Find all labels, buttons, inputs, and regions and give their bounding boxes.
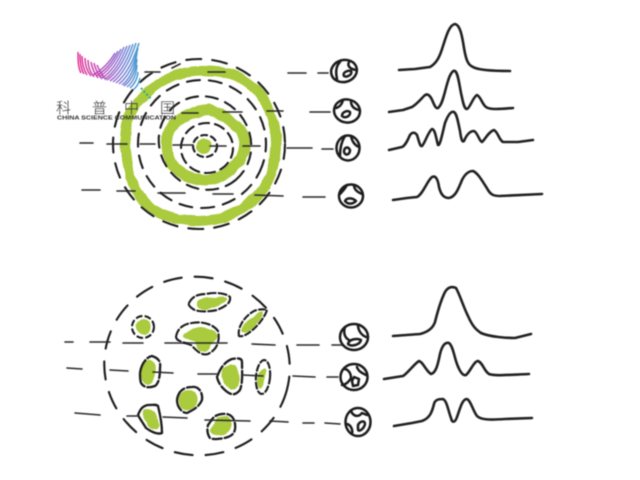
green centre dot (196, 138, 212, 154)
patch lower centre (175, 387, 201, 413)
green outer ring (125, 71, 276, 221)
logo teal dots (141, 88, 151, 99)
cell 7 (346, 408, 370, 436)
cell icons: top group (329, 57, 363, 208)
patch lower left (143, 410, 159, 429)
patch lower right (210, 416, 232, 436)
logo English wordmark: CHINA SCIENCE COMMUNICATION (57, 116, 176, 122)
diagram: concentric ring pattern (125, 71, 276, 221)
peak 1 (399, 24, 510, 71)
logo Chinese wordmark: 科 (56, 100, 71, 117)
green inner ring (167, 110, 245, 180)
scan lines: bottom group (65, 342, 342, 424)
cell 2 (332, 97, 362, 125)
logo Chinese wordmark: 中 (124, 100, 139, 117)
scan lines: top group (80, 64, 333, 197)
cell icons: bottom group (340, 324, 370, 436)
patch centre (183, 327, 219, 352)
peak 3 (389, 112, 533, 150)
patch left middle (140, 359, 156, 385)
spectrum curves: top group (389, 24, 542, 200)
cell 5 (340, 324, 368, 350)
dashed rings: outer circle bottom (84, 256, 310, 476)
peak 6 (384, 343, 529, 379)
patch right middle (222, 365, 239, 390)
peak 5 (393, 287, 531, 338)
dashed rings: concentric (113, 59, 285, 229)
logo Chinese wordmark: 普 (92, 100, 107, 117)
spectrum curves: bottom group (384, 287, 532, 426)
peak 4 (393, 171, 542, 200)
cell 1 (329, 57, 359, 85)
logo fan stripes (78, 43, 140, 90)
patch outlines (132, 293, 271, 439)
patch right diagonal (241, 311, 263, 333)
cell 6 (340, 364, 368, 390)
logo Chinese wordmark: 国 (160, 100, 175, 117)
cell 3 (336, 136, 360, 160)
peak 7 (394, 399, 532, 426)
patch top (197, 297, 227, 310)
peak 2 (389, 71, 513, 112)
logo Chinese wordmark (56, 100, 175, 117)
patch small left (133, 317, 153, 337)
cell 4 (339, 184, 363, 208)
green patches (133, 297, 268, 436)
patch far right (256, 366, 268, 390)
logo: China Science Communication (56, 43, 176, 122)
